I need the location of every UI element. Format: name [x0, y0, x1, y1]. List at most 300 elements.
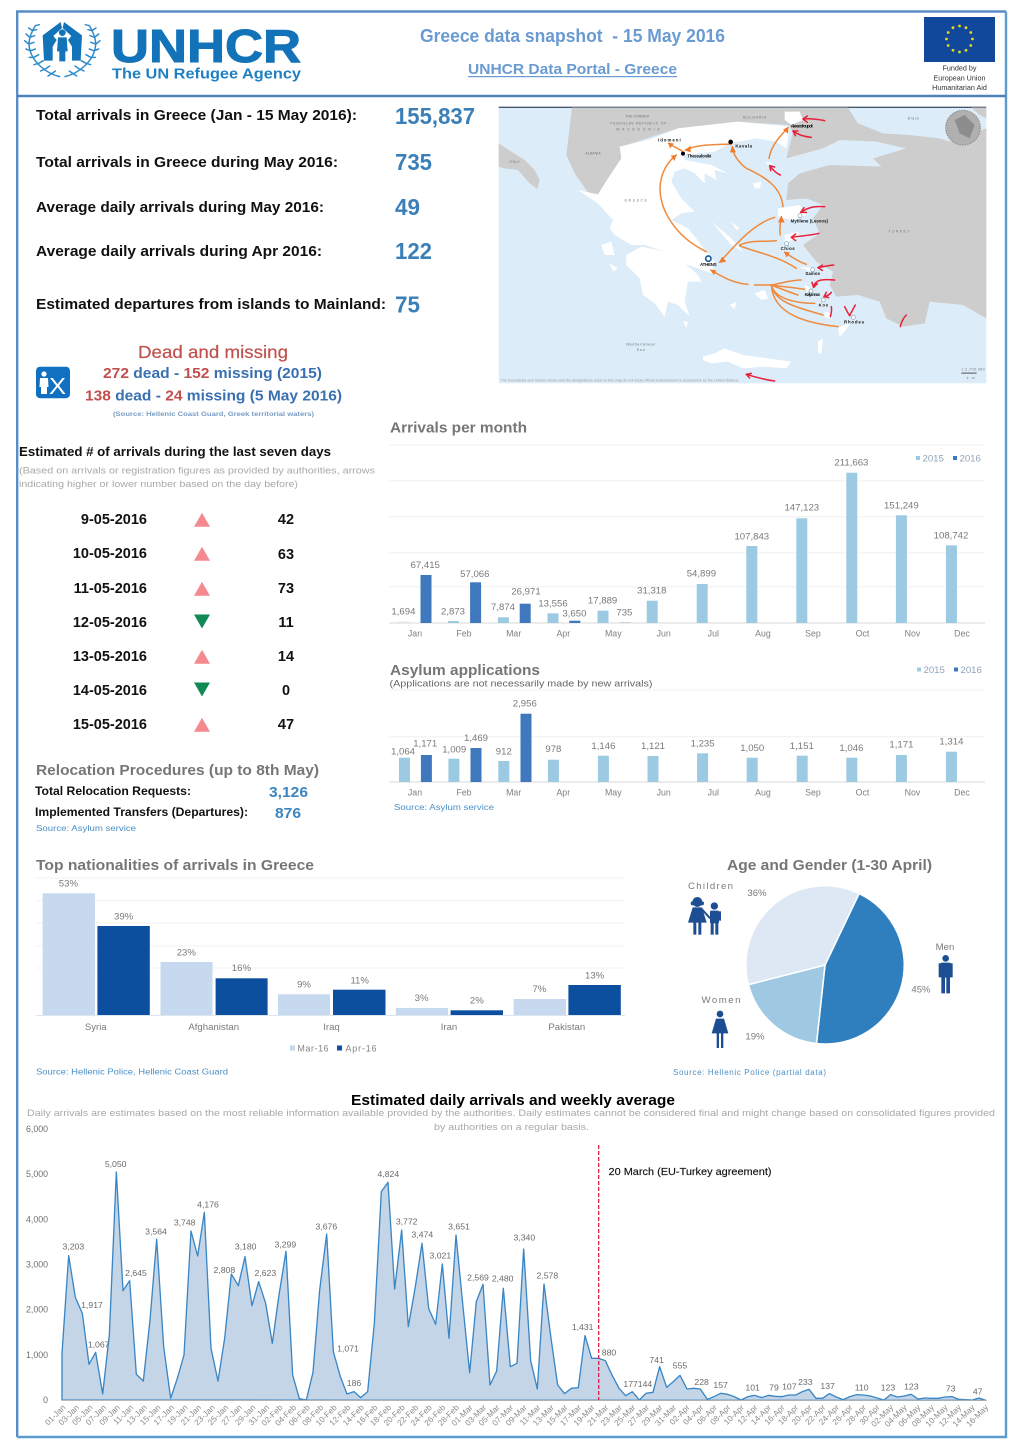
- date axis: 29-Jan: [233, 1403, 258, 1427]
- chart note: [27, 1108, 995, 1133]
- data labels: 2,808: [213, 1265, 235, 1275]
- logo tagline: The UN Refugee Agency: [112, 66, 302, 82]
- data labels: 1,694: [391, 606, 416, 617]
- map place labels: THE FORMER: [625, 115, 650, 119]
- funding note: Funded by: [943, 64, 977, 72]
- data labels: 3,203: [62, 1242, 84, 1252]
- date axis: 21-Mar: [586, 1403, 610, 1428]
- icon: EU flag: [924, 17, 995, 62]
- date axis: 19-Jan: [165, 1403, 190, 1427]
- month axis: May: [605, 628, 622, 638]
- date axis: 11-Mar: [518, 1403, 543, 1427]
- data labels: 3,340: [513, 1233, 535, 1243]
- date axis: 04-May: [883, 1402, 909, 1429]
- bars April: [97, 926, 621, 1015]
- map place labels: Idomeni: [658, 138, 681, 143]
- data labels: 3,748: [174, 1218, 196, 1228]
- date axis: 23-Jan: [193, 1403, 217, 1427]
- data labels: 3,651: [448, 1222, 470, 1232]
- data labels: 3,180: [235, 1242, 257, 1252]
- icon: missing person: [36, 367, 70, 399]
- map place labels: ITALY: [509, 160, 521, 164]
- data labels: 1,050: [740, 743, 764, 754]
- chart: age and gender: [673, 858, 954, 1077]
- date axis: 18-Apr: [776, 1403, 800, 1427]
- date axis: 07-Jan: [84, 1403, 108, 1427]
- map place labels: ATHENS: [700, 262, 717, 267]
- data labels: 7,874: [491, 602, 516, 613]
- date axis: 05-Jan: [70, 1403, 95, 1427]
- map place labels: Thessaloniki: [687, 153, 711, 158]
- month axis: Oct: [856, 788, 870, 798]
- explanation note: (Based on arrivals or registration figures as provided by authorities, arrows: [19, 466, 375, 476]
- panel: dead and missing: [36, 342, 342, 418]
- data labels: 3,474: [411, 1230, 433, 1240]
- land: neighbouring countries: [499, 108, 986, 327]
- date axis: 18-Feb: [368, 1403, 393, 1428]
- bars 2015: [399, 752, 957, 782]
- header: [25, 17, 995, 92]
- data labels: [391, 458, 968, 620]
- month axis: Dec: [954, 788, 970, 798]
- data labels: 1,009: [442, 745, 466, 756]
- month axis: Jan: [408, 628, 422, 638]
- heading: Estimated # of arrivals during the last seven days: [19, 445, 331, 459]
- data labels: 735: [616, 608, 632, 619]
- date axis: 10-Apr: [722, 1403, 746, 1427]
- data labels: 13,556: [538, 599, 568, 610]
- relocation requests: 3,126: [269, 784, 308, 801]
- month axis: Mar: [506, 788, 521, 798]
- month axis: Apr: [556, 628, 570, 638]
- data labels: 53%: [59, 879, 78, 890]
- date axis: 16-Feb: [355, 1403, 380, 1428]
- data labels: 978: [545, 744, 561, 755]
- map scale bar: 1:2,700,000: [961, 368, 985, 372]
- row 12 May: [73, 614, 294, 631]
- date axis: 12-Feb: [328, 1403, 353, 1428]
- map of Greece with routes: [499, 107, 986, 383]
- date axis: 02-Apr: [668, 1403, 692, 1427]
- legend: Apr-16: [346, 1043, 377, 1053]
- data labels: 2,645: [125, 1268, 147, 1278]
- map place labels: Rhodes: [844, 319, 865, 324]
- row 14 May: 14-05-2016: [73, 683, 147, 699]
- data labels: 101: [745, 1382, 760, 1392]
- date axis: 26-Feb: [423, 1403, 448, 1428]
- map place labels: [509, 115, 919, 352]
- date axis: 08-Apr: [709, 1403, 733, 1427]
- date axis: 10-May: [924, 1402, 950, 1429]
- data labels: 1,469: [464, 733, 488, 744]
- data labels: 2,569: [467, 1273, 489, 1283]
- map scale bar: [961, 368, 985, 380]
- map place labels: Kalymnos: [805, 292, 821, 297]
- data labels: 39%: [114, 911, 134, 922]
- row 14 May: [73, 682, 290, 699]
- row 9 May: 42: [278, 512, 294, 528]
- chart: top nationalities: [36, 858, 625, 1076]
- y axis: 2,000: [26, 1304, 48, 1314]
- globe locator: [946, 110, 980, 145]
- orange onward routes: [660, 128, 838, 327]
- data labels: 123: [881, 1382, 895, 1392]
- data labels: 3,772: [396, 1216, 418, 1226]
- date axis: 21-Jan: [179, 1403, 203, 1427]
- y axis: [26, 1124, 48, 1405]
- data labels: 107: [782, 1381, 797, 1391]
- legend: [290, 1043, 377, 1053]
- data labels: 2,578: [536, 1270, 558, 1280]
- date axis: 20-Apr: [790, 1403, 814, 1427]
- data labels: 741: [649, 1355, 664, 1365]
- month axis: Nov: [905, 788, 921, 798]
- data labels: 1,235: [691, 739, 715, 750]
- date axis: 31-Jan: [247, 1403, 271, 1427]
- icon: woman: [712, 1011, 728, 1048]
- date axis: 15-Mar: [545, 1403, 570, 1428]
- month axis: Jun: [657, 788, 671, 798]
- month axis: May: [605, 788, 622, 798]
- data labels: 1,917: [81, 1300, 103, 1310]
- bars 2015: [398, 473, 957, 623]
- date axis: 26-Apr: [831, 1403, 855, 1427]
- date axis: 19-Mar: [572, 1403, 597, 1428]
- month axis: [408, 788, 970, 798]
- chart note: Daily arrivals are estimates based on the most reliable information available provided by the authorities. Daily estimates cannot be considered final and might change based on consolidated figures provided: [27, 1108, 995, 1119]
- data labels: 3%: [415, 993, 429, 1004]
- date axis: 12-Apr: [736, 1403, 760, 1427]
- month axis: Jul: [708, 788, 719, 798]
- heading: dead and missing: Dead and missing: [138, 342, 288, 362]
- date axis: 09-Mar: [504, 1403, 529, 1428]
- month axis: Aug: [755, 628, 771, 638]
- data labels: 177: [623, 1379, 638, 1389]
- map place labels: Chios: [781, 246, 795, 251]
- data labels: 912: [496, 746, 512, 757]
- map place labels: Samos: [805, 271, 821, 276]
- date axis: 06-May: [897, 1402, 923, 1429]
- data labels: 1,046: [839, 743, 863, 754]
- source note: Source: Hellenic Police (partial data): [673, 1068, 826, 1077]
- date axis: 27-Mar: [626, 1403, 651, 1428]
- data labels: 144: [638, 1379, 652, 1389]
- data labels: 1,067: [88, 1340, 110, 1350]
- legend: 2015: [922, 454, 944, 464]
- panel: relocation procedures: [35, 763, 319, 833]
- date axis: 14-Apr: [749, 1403, 773, 1427]
- map place labels: Sea: [637, 348, 646, 352]
- date axis: [43, 1402, 991, 1429]
- chart note: by authorities on a regular basis.: [434, 1122, 589, 1133]
- data labels: 13%: [585, 971, 605, 982]
- marker line: 20 March: [598, 1145, 600, 1400]
- figures 2015: 272 dead - 152 missing (2015): [103, 365, 322, 382]
- data labels: 107,843: [734, 531, 769, 542]
- data labels: 26,971: [511, 587, 541, 598]
- chart: arrivals per month: [389, 421, 985, 638]
- date axis: 02-Feb: [260, 1403, 285, 1428]
- data labels: 23%: [177, 948, 196, 959]
- month axis: Feb: [456, 628, 472, 638]
- panel: last seven days: [19, 445, 375, 733]
- map place labels: Alexandroupoli: [791, 124, 813, 129]
- data labels: 2,956: [513, 699, 537, 710]
- row 12 May: 12-05-2016: [73, 615, 147, 631]
- date axis: 16-May: [965, 1402, 991, 1429]
- date axis: 22-Feb: [395, 1403, 421, 1428]
- category axis: Pakistan: [548, 1022, 585, 1033]
- data labels: 123: [904, 1381, 919, 1391]
- y axis: 0: [43, 1395, 48, 1405]
- category axis: Syria: [85, 1022, 107, 1033]
- legend: 2016: [960, 665, 982, 676]
- data labels: 880: [602, 1347, 616, 1357]
- data labels: 137: [820, 1381, 835, 1391]
- data labels: 211,663: [834, 458, 868, 469]
- stat: daily average May: Average daily arrivals during May 2016:: [36, 200, 324, 216]
- date axis: 10-Feb: [314, 1403, 339, 1428]
- data labels: 3,021: [429, 1250, 451, 1260]
- funding note: European Union: [934, 74, 985, 82]
- date axis: 24-Apr: [817, 1403, 841, 1427]
- map place labels: GREECE: [624, 199, 648, 203]
- date axis: 06-Feb: [287, 1403, 312, 1428]
- label: men: 45%: [911, 984, 931, 996]
- date axis: 16-Apr: [763, 1403, 787, 1427]
- funding note: [932, 64, 987, 92]
- date axis: 24-Feb: [409, 1403, 434, 1428]
- data labels: [391, 699, 964, 757]
- annotation: EU-Turkey agreement: 20 March (EU-Turkey agreement): [608, 1166, 772, 1178]
- key figures: [36, 103, 475, 318]
- label: women: Women: [702, 995, 740, 1006]
- stat: arrivals during May: 735: [395, 149, 432, 175]
- heading: Estimated daily arrivals and weekly average: [351, 1093, 675, 1109]
- data labels: 67,415: [411, 560, 440, 571]
- title: Greece data snapshot - 15 May 2016: [420, 26, 725, 46]
- date axis: 13-Jan: [125, 1403, 149, 1427]
- data labels: 11%: [350, 975, 369, 986]
- date axis: 01-Jan: [43, 1403, 68, 1427]
- month axis: Dec: [954, 628, 970, 638]
- UNHCR wordmark: UNHCR: [111, 20, 301, 72]
- stat: departures to mainland: 75: [395, 292, 420, 318]
- source note: (Source: Hellenic Coast Guard, Greek territorial waters): [113, 411, 314, 418]
- date axis: 15-Jan: [138, 1403, 163, 1427]
- heading: Top nationalities of arrivals in Greece: [36, 858, 314, 874]
- date axis: 17-Jan: [152, 1403, 176, 1427]
- row 10 May: [73, 546, 294, 563]
- y axis: 5,000: [26, 1169, 48, 1179]
- map place labels: Black: [908, 117, 919, 121]
- legend: Mar-16: [298, 1043, 329, 1053]
- data labels: 555: [673, 1360, 687, 1370]
- month axis: Mar: [506, 628, 521, 638]
- pie chart: [746, 886, 904, 1044]
- map place labels: MACEDONIA: [616, 127, 660, 131]
- source note: Source: Asylum service: [36, 824, 137, 833]
- row 9 May: [81, 512, 294, 528]
- data labels: 2%: [470, 995, 484, 1006]
- data labels: 3,650: [562, 609, 586, 620]
- month axis: Jun: [657, 628, 671, 638]
- data labels: 1,314: [939, 736, 964, 747]
- data labels: 31,318: [637, 586, 666, 597]
- date axis: 17-Mar: [558, 1403, 583, 1428]
- UNHCR logo: [25, 20, 302, 82]
- legend: 2015: [924, 665, 945, 676]
- date axis: 08-Feb: [300, 1403, 326, 1428]
- map disclaimer: The boundaries and names shown and the designations used on this map do not imply official endorsement or acceptance by the United Nations.: [501, 378, 739, 383]
- date axis: 20-Feb: [382, 1403, 407, 1428]
- y axis: 3,000: [26, 1260, 48, 1270]
- row 11 May: 73: [278, 581, 294, 597]
- data labels: 5,050: [105, 1159, 127, 1169]
- date axis: 09-Jan: [98, 1403, 122, 1427]
- date axis: 14-Feb: [341, 1403, 366, 1428]
- data labels: 147,123: [784, 503, 819, 514]
- date axis: 31-Mar: [653, 1403, 678, 1428]
- date axis: 14-May: [951, 1402, 977, 1429]
- month axis: Aug: [755, 788, 771, 798]
- month axis: Sep: [805, 628, 821, 638]
- map place labels: TURKEY: [888, 230, 910, 234]
- date axis: 25-Jan: [206, 1403, 231, 1427]
- icon: laurel emblem: [25, 22, 100, 77]
- label: men: Men: [936, 942, 954, 953]
- land: Greece: [578, 112, 851, 368]
- map place labels: BULGARIA: [743, 115, 767, 119]
- data labels: 1,146: [591, 741, 615, 752]
- heading: Asylum applications: [390, 663, 540, 679]
- data labels: 2,623: [254, 1268, 276, 1278]
- map place labels: Mediterranean: [626, 343, 655, 347]
- date axis: 11-Jan: [112, 1403, 136, 1427]
- date axis: 04-Feb: [273, 1403, 298, 1428]
- category axis: [85, 1022, 585, 1033]
- row 9 May: 9-05-2016: [81, 512, 147, 528]
- row 15 May: [73, 717, 294, 733]
- map scale bar: km: [967, 376, 975, 380]
- data labels: 233: [798, 1377, 813, 1387]
- date axis: 30-Apr: [858, 1403, 882, 1427]
- data labels: 54,899: [687, 569, 716, 580]
- data labels: 16%: [232, 963, 251, 974]
- bars March: [43, 893, 566, 1015]
- data labels: 1,121: [641, 741, 665, 752]
- stat: daily average April: [36, 238, 432, 264]
- month axis: Apr: [556, 788, 570, 798]
- date axis: 28-Apr: [844, 1403, 868, 1427]
- data labels: 73: [946, 1383, 956, 1393]
- stat: arrivals during May: Total arrivals in Greece during May 2016:: [36, 155, 338, 171]
- data labels: 1,064: [391, 746, 416, 757]
- data labels: 1,151: [790, 741, 814, 752]
- data labels: 47: [973, 1387, 983, 1397]
- row 13 May: 14: [278, 649, 294, 665]
- row 13 May: 13-05-2016: [73, 649, 147, 665]
- stat: daily average April: 122: [395, 238, 432, 264]
- chart: asylum applications: [389, 663, 985, 812]
- chart note: (Applications are not necessarily made by new arrivals): [390, 679, 652, 689]
- row 11 May: [74, 581, 294, 597]
- label: children: 36%: [747, 888, 767, 899]
- date axis: 23-Mar: [599, 1403, 624, 1428]
- date axis: 08-May: [910, 1402, 937, 1429]
- map place labels: Mytilene (Lesvos): [791, 218, 829, 223]
- data labels: 9%: [297, 980, 311, 991]
- source note: Source: Asylum service: [394, 803, 495, 812]
- stat: total arrivals: 155,837: [395, 103, 475, 129]
- date axis: 01-Mar: [450, 1403, 475, 1428]
- data labels: 157: [713, 1380, 728, 1390]
- row 13 May: [73, 649, 294, 665]
- data labels: 57,066: [460, 569, 489, 580]
- data labels: 2,873: [441, 606, 465, 617]
- legend: [917, 665, 982, 676]
- label: children: Children: [688, 881, 733, 892]
- stat: daily average May: 49: [395, 194, 420, 220]
- data labels: 7%: [532, 984, 547, 995]
- data labels: 3,676: [315, 1222, 337, 1232]
- row 12 May: 11: [278, 615, 294, 631]
- stat: daily average May: [36, 194, 420, 220]
- stat: total arrivals: Total arrivals in Greece (Jan - 15 May 2016):: [36, 108, 357, 124]
- label: women: 19%: [745, 1032, 765, 1042]
- date axis: 03-Mar: [463, 1403, 488, 1428]
- date axis: 22-Apr: [804, 1403, 828, 1427]
- legend: [916, 454, 981, 464]
- date axis: 06-Apr: [695, 1403, 719, 1427]
- stat: daily average April: Average daily arrivals during Apr 2016:: [36, 244, 322, 260]
- heading: Age and Gender (1-30 April): [727, 858, 932, 874]
- row 15 May: 47: [278, 717, 294, 733]
- category axis: Afghanistan: [188, 1022, 239, 1033]
- explanation note: [19, 466, 375, 490]
- row 11 May: 11-05-2016: [74, 581, 147, 597]
- date axis: 05-Mar: [477, 1403, 502, 1428]
- month axis: [408, 628, 970, 638]
- stat: total arrivals: [36, 103, 475, 129]
- date axis: 03-Jan: [57, 1403, 81, 1427]
- data portal link: UNHCR Data Portal - Greece: [468, 61, 677, 78]
- bars 2016: [420, 575, 630, 623]
- data labels: 228: [694, 1377, 709, 1387]
- data labels: 110: [855, 1382, 869, 1392]
- explanation note: indicating higher or lower number based on the day before): [19, 479, 298, 490]
- data labels: 1,171: [413, 739, 437, 750]
- data labels: 3,299: [274, 1239, 296, 1249]
- y axis: 4,000: [26, 1214, 48, 1224]
- town markers: [681, 140, 855, 319]
- relocation requests: [35, 784, 308, 801]
- month axis: Jan: [408, 788, 422, 798]
- data labels: 3,564: [145, 1226, 167, 1236]
- stat: departures to mainland: [36, 292, 420, 318]
- red sea crossing arrows: [746, 116, 906, 381]
- date axis: 02-May: [870, 1402, 896, 1429]
- figures 2016: 138 dead - 24 missing (5 May 2016): [85, 388, 342, 404]
- map place labels: ALBANIA: [585, 152, 601, 156]
- chart: daily arrivals: [26, 1093, 995, 1429]
- row 10 May: 10-05-2016: [73, 546, 147, 562]
- label: children: [688, 881, 767, 899]
- data labels: 1,171: [889, 740, 913, 751]
- map place labels: Kavala: [735, 143, 753, 148]
- legend: 2016: [960, 454, 981, 464]
- month axis: Jul: [708, 628, 719, 638]
